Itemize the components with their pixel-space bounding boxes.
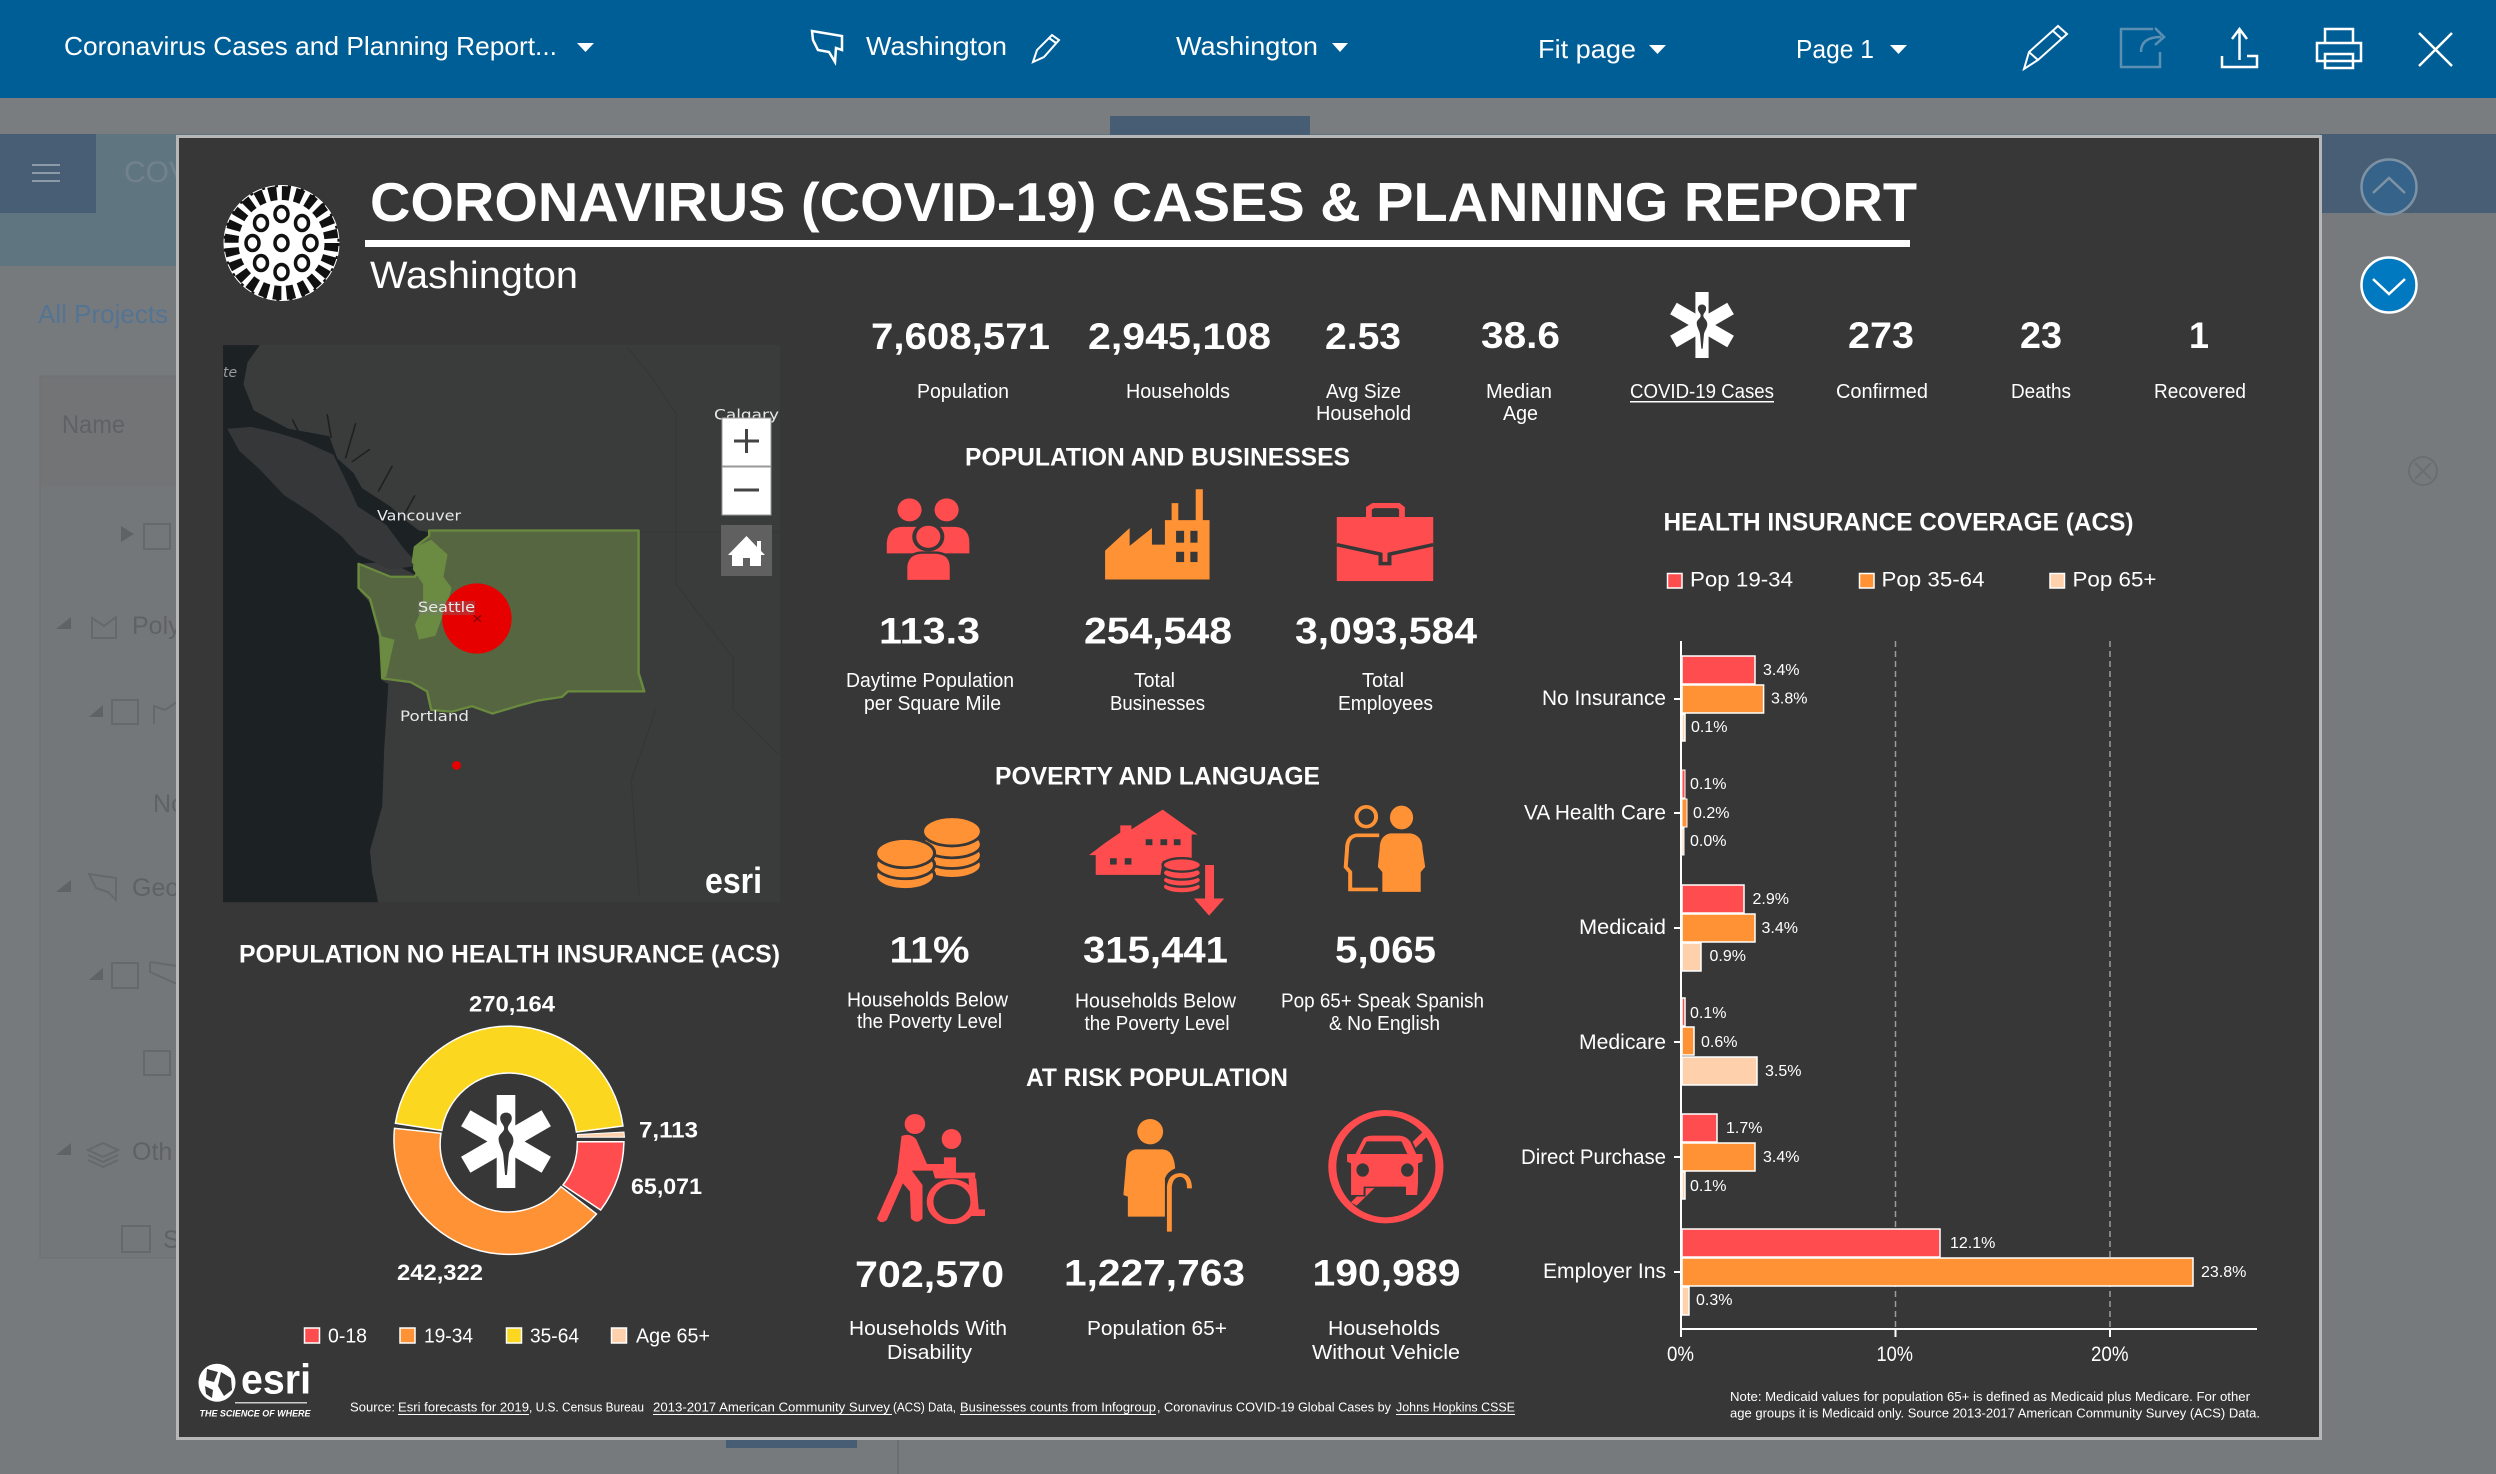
source line: (ACS) Data, bbox=[893, 1401, 956, 1415]
chart note: age groups it is Medicaid only. Source 2013-2017 American Community Survey (ACS) Data. bbox=[1730, 1405, 2260, 1420]
stat: spanish speakers: 5,065 bbox=[1335, 930, 1436, 971]
donut chart bbox=[394, 992, 702, 1285]
stat: recovered: Recovered bbox=[2154, 381, 2246, 403]
group: employer insurance: 0.3% bbox=[1696, 1292, 1732, 1309]
source line: 2013-2017 American Community Survey bbox=[653, 1401, 891, 1415]
source line: , Coronavirus COVID-19 Global Cases by bbox=[1157, 1401, 1392, 1415]
stat: households with disability: Households With bbox=[849, 1318, 1007, 1340]
slice: age 65+ bbox=[578, 1132, 624, 1137]
stat: daytime population: Daytime Population bbox=[846, 670, 1014, 692]
group: medicaid: 0.9% bbox=[1710, 948, 1746, 965]
group: medicare bbox=[1579, 998, 1801, 1085]
stat: households: 2,945,108 bbox=[1088, 316, 1271, 357]
donut legend: 0-18 bbox=[328, 1326, 367, 1348]
dimmed application background: COV bbox=[124, 156, 189, 189]
slice: 19-34 bbox=[394, 1128, 596, 1254]
stat: spanish speakers: Pop 65+ Speak Spanish bbox=[1281, 990, 1484, 1012]
donut value labels: 65,071 bbox=[631, 1174, 702, 1199]
group: medicare: 0.1% bbox=[1690, 1005, 1726, 1022]
stat: households bbox=[1088, 316, 1271, 403]
source line: Source: bbox=[350, 1401, 395, 1415]
fit page arrow bbox=[1649, 45, 1666, 54]
home button bbox=[721, 525, 772, 576]
map esri logo: esri bbox=[705, 860, 762, 901]
esri logo bbox=[198, 1355, 311, 1420]
geography dropdown: Washington bbox=[1176, 31, 1318, 61]
stat: spanish speakers bbox=[1281, 930, 1484, 1035]
group: medicaid: 2.9% bbox=[1752, 891, 1789, 908]
donut legend: 19-34 bbox=[424, 1326, 473, 1348]
donut value labels: 242,322 bbox=[397, 1260, 483, 1285]
stat: daytime population: per Square Mile bbox=[864, 693, 1001, 715]
report selector: Coronavirus Cases and Planning Report... bbox=[64, 31, 557, 61]
group: va health care: 0.1% bbox=[1690, 776, 1726, 793]
chart axes bbox=[1674, 641, 2257, 1337]
stat: median age: 38.6 bbox=[1481, 315, 1560, 356]
scroll up button bbox=[2362, 160, 2416, 214]
group: direct purchase: Direct Purchase bbox=[1521, 1146, 1666, 1169]
group: employer insurance bbox=[1543, 1229, 2246, 1315]
map labels: Seattle bbox=[418, 600, 475, 616]
group: va health care: 0.2% bbox=[1693, 805, 1729, 822]
stat: total employees: 3,093,584 bbox=[1295, 610, 1477, 652]
source line: Businesses counts from Infogroup bbox=[960, 1401, 1156, 1415]
stat: households without vehicle: 190,989 bbox=[1312, 1253, 1460, 1294]
heading: poverty and language: POVERTY AND LANGUAGE bbox=[995, 763, 1320, 791]
icon: small pencil bbox=[1033, 35, 1059, 62]
stat: deaths bbox=[2011, 315, 2071, 403]
group: no insurance: 0.1% bbox=[1691, 719, 1727, 736]
group: no insurance: No Insurance bbox=[1542, 687, 1666, 710]
group: direct purchase: 3.4% bbox=[1763, 1149, 1799, 1166]
stat: average household size: Household bbox=[1316, 403, 1411, 425]
stat: poverty percent: 11% bbox=[890, 930, 970, 971]
stat: average household size: 2.53 bbox=[1325, 316, 1401, 357]
stat: median age: Age bbox=[1503, 403, 1538, 425]
title underline bbox=[365, 240, 1910, 247]
stat: total businesses: Businesses bbox=[1110, 693, 1205, 715]
group: va health care: VA Health Care bbox=[1524, 802, 1666, 824]
group: va health care: 0.0% bbox=[1690, 833, 1726, 850]
slice: 0-18 bbox=[563, 1142, 624, 1210]
group: no insurance: 3.4% bbox=[1763, 662, 1799, 679]
chart note: Note: Medicaid values for population 65+ is defined as Medicaid plus Medicare. For other bbox=[1730, 1389, 2251, 1404]
group: employer insurance: 23.8% bbox=[2201, 1264, 2246, 1281]
stat: households with disability: Disability bbox=[887, 1342, 972, 1364]
chart note bbox=[1730, 1389, 2260, 1420]
donut value labels bbox=[397, 992, 702, 1285]
map labels: Vancouver bbox=[377, 508, 461, 524]
icon: large pencil bbox=[2024, 26, 2067, 69]
icon: star of life bbox=[1670, 292, 1734, 358]
axis labels bbox=[1667, 1343, 2128, 1366]
stat: total businesses bbox=[1084, 610, 1232, 715]
stat: population: 7,608,571 bbox=[871, 316, 1050, 357]
icon: wheelchair bbox=[877, 1114, 985, 1222]
stat: poverty percent bbox=[847, 930, 1009, 1033]
icon: region outline bbox=[812, 31, 842, 62]
group: medicaid bbox=[1579, 885, 1798, 971]
stat: median age: Median bbox=[1486, 381, 1552, 403]
slice: 35-64 bbox=[395, 1026, 623, 1132]
dimmed application background: Geo bbox=[132, 874, 179, 902]
map geography bbox=[223, 345, 780, 902]
stat: households below poverty: Households Below bbox=[1075, 990, 1237, 1012]
bar chart legend: Pop 65+ bbox=[2072, 569, 2156, 592]
source line bbox=[350, 1401, 1515, 1415]
stat: recovered bbox=[2154, 315, 2246, 403]
stat: total businesses: Total bbox=[1134, 670, 1175, 692]
esri logo: THE SCIENCE OF WHERE bbox=[200, 1409, 311, 1420]
axis labels: 10% bbox=[1876, 1343, 1913, 1366]
group: direct purchase: 1.7% bbox=[1726, 1120, 1762, 1137]
stat: spanish speakers: & No English bbox=[1329, 1013, 1440, 1035]
zoom in button bbox=[722, 418, 771, 466]
donut value labels: 270,164 bbox=[469, 992, 556, 1017]
donut legend bbox=[304, 1326, 710, 1348]
dimmed application background: All Projects bbox=[38, 299, 168, 329]
stat: households with disability bbox=[849, 1254, 1007, 1364]
icon: house with coins and down arrow bbox=[1089, 810, 1224, 916]
stat: households below poverty bbox=[1075, 930, 1237, 1035]
icon: no vehicle bbox=[1332, 1113, 1439, 1220]
source line: Esri forecasts for 2019 bbox=[398, 1401, 529, 1415]
stat: population 65+: Population 65+ bbox=[1087, 1318, 1227, 1340]
group: medicaid: Medicaid bbox=[1579, 916, 1666, 939]
donut value labels: 7,113 bbox=[639, 1118, 698, 1143]
group: va health care bbox=[1524, 770, 1729, 855]
stat: households with disability: 702,570 bbox=[855, 1254, 1004, 1295]
fit page dropdown: Fit page bbox=[1538, 34, 1636, 64]
geography dropdown arrow bbox=[1332, 43, 1348, 52]
axis labels: 20% bbox=[2091, 1343, 2128, 1366]
dimmed application background: Oth bbox=[132, 1138, 172, 1166]
group: medicare: 0.6% bbox=[1701, 1034, 1737, 1051]
icon: close bbox=[2419, 33, 2452, 66]
stat: deaths: 23 bbox=[2020, 315, 2062, 356]
page arrow bbox=[1890, 45, 1907, 54]
icon: upload bbox=[2222, 29, 2257, 67]
heading: at risk population: AT RISK POPULATION bbox=[1026, 1064, 1288, 1092]
donut legend: Age 65+ bbox=[636, 1326, 710, 1348]
source line: Johns Hopkins CSSE bbox=[1396, 1401, 1515, 1415]
map labels: Calgary bbox=[714, 408, 779, 424]
axis labels: 0% bbox=[1667, 1343, 1694, 1366]
stat: poverty percent: the Poverty Level bbox=[857, 1011, 1002, 1033]
stat: population 65+: 1,227,763 bbox=[1064, 1253, 1245, 1294]
stat: daytime population: 113.3 bbox=[879, 610, 980, 652]
icon: two people speaking bbox=[1346, 806, 1425, 892]
group: no insurance: 3.8% bbox=[1771, 690, 1807, 708]
report panel bbox=[178, 136, 2320, 1438]
icon: share disabled bbox=[2121, 28, 2164, 67]
group: employer insurance: Employer Ins bbox=[1543, 1260, 1666, 1283]
stat: households without vehicle: Without Vehicle bbox=[1312, 1342, 1460, 1364]
stat: recovered: 1 bbox=[2189, 315, 2209, 356]
region name: Washington bbox=[866, 31, 1007, 61]
icon: coronavirus logo bbox=[224, 185, 340, 301]
group: direct purchase bbox=[1521, 1114, 1799, 1199]
scroll down button bbox=[2362, 258, 2416, 312]
stat: population: Population bbox=[917, 381, 1009, 403]
stat: households without vehicle bbox=[1312, 1253, 1460, 1364]
group: direct purchase: 0.1% bbox=[1690, 1178, 1726, 1195]
icon: people bbox=[887, 498, 969, 581]
stat: confirmed: 273 bbox=[1848, 315, 1914, 356]
icon: print bbox=[2317, 29, 2361, 68]
group: employer insurance: 12.1% bbox=[1950, 1235, 1995, 1252]
donut legend: 35-64 bbox=[530, 1326, 579, 1348]
stat: poverty percent: Households Below bbox=[847, 990, 1009, 1012]
map labels bbox=[223, 365, 779, 725]
stat: households: Households bbox=[1126, 381, 1230, 403]
page dropdown: Page 1 bbox=[1796, 34, 1874, 64]
top toolbar bbox=[0, 0, 2496, 98]
heading: population and businesses: POPULATION AND BUSINESSES bbox=[965, 444, 1350, 472]
group: medicaid: 3.4% bbox=[1762, 920, 1798, 937]
map labels: te bbox=[223, 365, 237, 381]
map labels: Portland bbox=[400, 709, 469, 725]
zoom out button bbox=[722, 467, 771, 515]
map bbox=[223, 345, 780, 902]
heading: population no health insurance: POPULATION NO HEALTH INSURANCE (ACS) bbox=[239, 941, 780, 969]
dimmed application background: No bbox=[153, 790, 185, 818]
stat: average household size: Avg Size bbox=[1326, 381, 1401, 403]
report dropdown arrow bbox=[577, 43, 594, 52]
icon: factory bbox=[1105, 489, 1210, 579]
icon: coins bbox=[876, 817, 981, 889]
dimmed application background: Name bbox=[62, 411, 125, 439]
covid-19 cases link: COVID-19 Cases bbox=[1630, 381, 1774, 403]
stat: total employees: Employees bbox=[1338, 693, 1433, 715]
icon: star of life centre bbox=[461, 1095, 551, 1188]
stat: households below poverty: 315,441 bbox=[1083, 930, 1228, 971]
stat: households below poverty: the Poverty Level bbox=[1084, 1013, 1230, 1035]
group: no insurance bbox=[1542, 656, 1807, 741]
stat: population bbox=[871, 316, 1050, 403]
icon: elderly person with cane bbox=[1123, 1119, 1189, 1232]
bar chart bbox=[1521, 641, 2257, 1366]
stat: confirmed: Confirmed bbox=[1836, 381, 1928, 403]
dimmed application background: S bbox=[163, 1226, 180, 1254]
stat: total businesses: 254,548 bbox=[1084, 610, 1232, 652]
heading: health insurance coverage: HEALTH INSURANCE COVERAGE (ACS) bbox=[1664, 509, 2134, 537]
source line: , U.S. Census Bureau bbox=[529, 1401, 644, 1415]
subtitle: Washington bbox=[370, 255, 578, 297]
stat: total employees: Total bbox=[1362, 670, 1404, 692]
esri logo: esri bbox=[241, 1355, 311, 1402]
stat: daytime population bbox=[846, 610, 1014, 715]
stat: average household size bbox=[1316, 316, 1411, 425]
stat: confirmed bbox=[1836, 315, 1928, 403]
bar chart legend bbox=[1668, 569, 2156, 592]
title: CORONAVIRUS (COVID-19) CASES & PLANNING REPORT bbox=[370, 171, 1917, 233]
group: medicare: Medicare bbox=[1579, 1031, 1666, 1054]
bar chart legend: Pop 19-34 bbox=[1690, 569, 1793, 592]
stat: population 65+ bbox=[1064, 1253, 1245, 1340]
bar chart legend: Pop 35-64 bbox=[1882, 569, 1985, 592]
stat: deaths: Deaths bbox=[2011, 381, 2071, 403]
stat: total employees bbox=[1295, 610, 1477, 715]
stat: median age bbox=[1481, 315, 1560, 425]
group: medicare: 3.5% bbox=[1765, 1063, 1801, 1080]
icon: briefcase bbox=[1337, 506, 1433, 581]
dimmed application background: Poly bbox=[132, 612, 181, 640]
stat: households without vehicle: Households bbox=[1328, 1318, 1440, 1340]
